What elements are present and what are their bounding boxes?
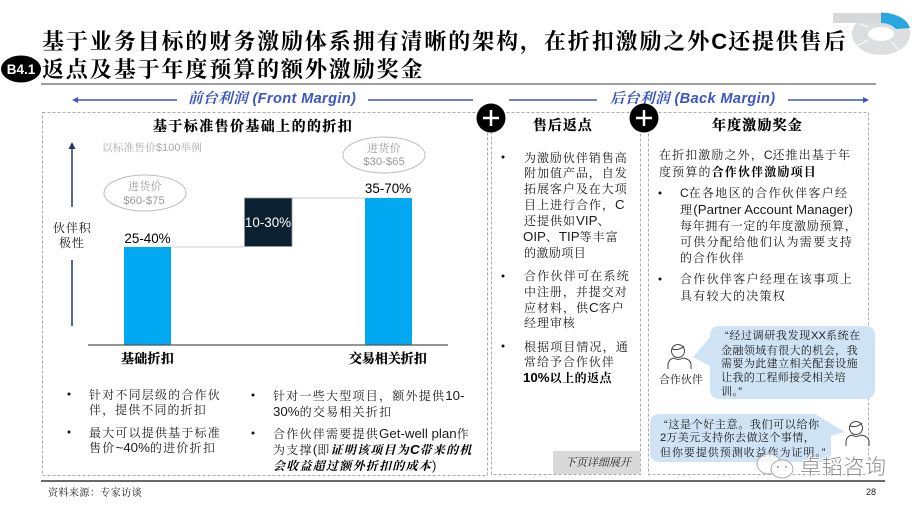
text block: rebate bullets: 拓展客户及在大项 <box>524 181 628 196</box>
text block: bonus bullets: 具有较大的决策权 <box>680 288 786 303</box>
text block: bonus bullets: 的合作伙伴 <box>680 250 745 265</box>
speech bubble: account manager reply: 但你要提供预测收益作为证明。” <box>660 445 826 459</box>
text block: rebate bullets: 为激励伙伴销售高 <box>524 150 628 165</box>
plus sign: rebate and bonus <box>630 104 658 132</box>
axis: partner motivation <box>53 142 92 326</box>
section badge B4.1: B4.1 <box>7 62 36 77</box>
text block: rebate bullets: 合作伙伴可在系统 <box>524 268 630 283</box>
bar chart: 25-40% <box>124 231 171 246</box>
text block: transaction discount bullets: 为支撑(即证明该项目为C带来的机 <box>273 442 473 457</box>
callout: purchase price 30-65 <box>343 137 425 173</box>
title: 返点及基于年度预算的额外激励奖金 <box>42 57 424 82</box>
note box: next page details <box>553 451 640 474</box>
text block: rebate bullets <box>502 150 630 385</box>
speech bubble: partner quote: 金融领域有很大的机会，我 <box>721 343 858 357</box>
speech bubble: partner quote: 让我的工程师接受相关培 <box>721 370 846 384</box>
text block: bonus bullets <box>658 185 858 303</box>
text block: base discount bullets: 针对不同层级的合作伙 <box>89 387 221 402</box>
text block: rebate bullets: 中注册，并提交对 <box>524 284 628 299</box>
text block: base discount bullets <box>68 387 221 455</box>
panel heading: bonus: 年度激励奖金 <box>712 117 803 133</box>
speech bubble: account manager reply <box>650 414 845 462</box>
text block: transaction discount bullets: 30%的交易相关折扣 <box>273 404 392 419</box>
panel heading: rebate: 售后返点 <box>533 117 593 133</box>
bar chart: 基础折扣 <box>121 351 175 366</box>
back margin header arrow: 后台利润 (Back Margin) <box>610 90 776 107</box>
text block: transaction discount bullets: 会收益超过额外折扣的成本) <box>273 458 436 473</box>
back margin header arrow <box>509 90 869 107</box>
speech bubble: account manager reply: “这是个好主意。我们可以给你 <box>664 417 820 431</box>
callout: purchase price 30-65: 进货价 <box>367 141 401 155</box>
bar chart: 10-30% <box>245 215 291 230</box>
speech bubble: partner quote <box>693 326 875 399</box>
icon: partner person <box>668 344 691 369</box>
source note: 资料来源：专家访谈 <box>48 486 142 499</box>
text block: rebate bullets: 目上进行合作，C <box>524 197 625 212</box>
text block: transaction discount bullets: 针对一些大型项目，额外提供10- <box>273 388 464 403</box>
section badge B4.1 <box>1 56 41 82</box>
note: price example: 以标准售价$100举例 <box>102 141 202 154</box>
text block: bonus intro <box>659 147 851 179</box>
text block: bonus intro: 度预算的合作伙伴激励项目 <box>659 164 817 179</box>
text block: rebate bullets: 应材料，供C客户 <box>524 300 625 315</box>
panel: annual incentive bonus <box>648 112 875 474</box>
text block: rebate bullets: 的激励项目 <box>524 245 587 260</box>
callout: purchase price 60-75: $60-$75 <box>123 195 165 207</box>
watermark: 卓韬咨询 <box>800 451 886 481</box>
label: partner: 合作伙伴 <box>659 372 703 386</box>
title: 基于业务目标的财务激励体系拥有清晰的架构，在折扣激励之外C还提供售后 <box>42 29 848 55</box>
text block: base discount bullets: 伴，提供不同的折扣 <box>89 402 207 417</box>
text block: bonus bullets: C在各地区的合作伙伴客户经 <box>680 185 848 200</box>
callout: purchase price 60-75 <box>104 175 186 211</box>
callout: purchase price 30-65: $30-$65 <box>363 156 405 168</box>
front margin header arrow: 前台利润 (Front Margin) <box>188 90 356 107</box>
text block: bonus bullets: 可供分配给他们认为需要支持 <box>680 234 853 249</box>
speech bubble: partner quote: 需要为此建立相关配套设施 <box>721 356 858 370</box>
plus sign: front and rebate <box>476 104 506 132</box>
note box: next page details: 下页详细展开 <box>565 456 633 469</box>
panel heading: discount: 基于标准售价基础上的的折扣 <box>153 118 353 134</box>
front margin header arrow <box>72 90 473 107</box>
panel: front margin discount <box>42 112 488 476</box>
speech bubble: account manager reply: 2万美元支持你去做这个事情， <box>660 430 815 444</box>
page number: 28 <box>866 487 876 497</box>
watermark <box>757 451 886 481</box>
text block: bonus bullets: 每年拥有一定的年度激励预算， <box>680 218 858 233</box>
text block: rebate bullets: OIP、TIP等丰富 <box>523 229 619 244</box>
logo <box>833 12 910 55</box>
text block: transaction discount bullets: 合作伙伴需要提供Get-well plan作 <box>273 426 470 441</box>
panel: after-sales rebate <box>492 112 640 474</box>
text block: bonus bullets: 合作伙伴客户经理在该事项上 <box>680 271 853 286</box>
speech bubble: partner quote: “经过调研我发现XX系统在 <box>725 328 861 342</box>
axis: partner motivation: 极性 <box>59 235 85 250</box>
bar chart: 交易相关折扣 <box>349 351 428 366</box>
bar chart <box>88 181 448 366</box>
bar chart: 35-70% <box>365 181 411 196</box>
text block: rebate bullets: 根据项目情况，通 <box>524 339 629 354</box>
speech bubble: partner quote: 训。” <box>721 384 742 398</box>
text block: bonus bullets: 理(Partner Account Manager) <box>680 202 853 217</box>
title <box>42 29 848 82</box>
text block: bonus intro: 在折扣激励之外，C还推出基于年 <box>659 147 851 162</box>
text block: rebate bullets: 10%以上的返点 <box>523 370 613 385</box>
icon: account manager person <box>846 422 869 446</box>
callout: purchase price 60-75: 进货价 <box>128 179 162 193</box>
text block: base discount bullets: 最大可以提供基于标准 <box>89 425 221 440</box>
text block: rebate bullets: 常给予合作伙伴 <box>524 354 615 369</box>
axis: partner motivation: 伙伴积 <box>53 220 92 235</box>
text block: rebate bullets: 附加值产品，自发 <box>524 165 628 180</box>
text block: base discount bullets: 售价~40%的进价折扣 <box>89 440 216 455</box>
text block: rebate bullets: 经理审核 <box>524 315 576 330</box>
text block: rebate bullets: 还提供如VIP、 <box>524 213 610 228</box>
text block: transaction discount bullets <box>252 388 473 473</box>
